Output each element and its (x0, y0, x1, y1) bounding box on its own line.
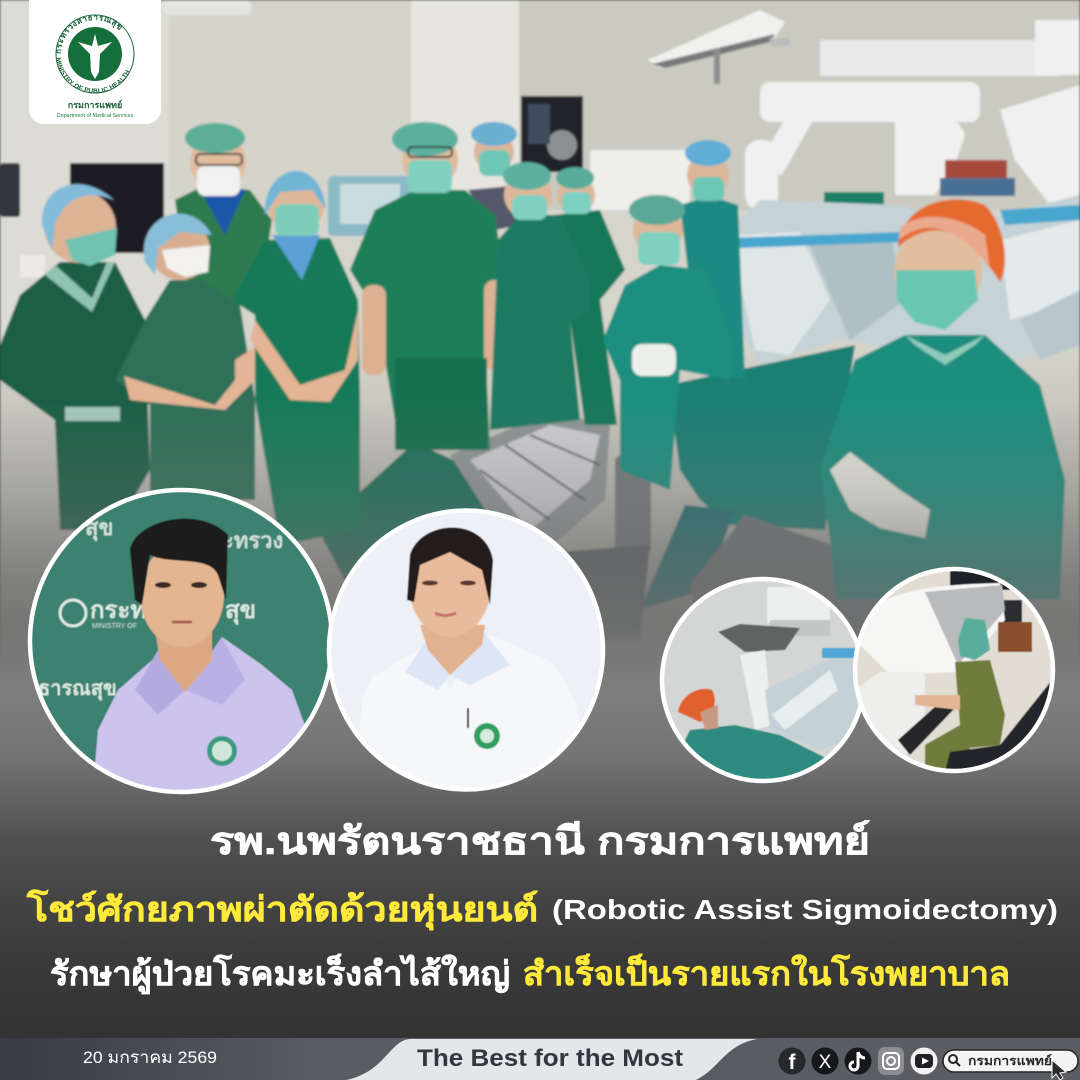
wall monitor (521, 96, 583, 172)
icon: facebook: f (788, 1051, 796, 1074)
icon: X: X (819, 1052, 832, 1073)
logo seal: กระทรวงสาธารณสุข (56, 16, 122, 54)
date: 20 มกราคม 2569 (83, 1048, 217, 1067)
logo caption English: Department of Medical Services (57, 113, 133, 119)
search pill (943, 1050, 1078, 1072)
person: woman dress gown (490, 162, 590, 430)
headline (26, 820, 1058, 995)
draped table and instruments (318, 345, 920, 640)
icon: instagram (878, 1047, 904, 1075)
icon: cursor (1052, 1060, 1066, 1080)
photo circle: robot arms in theatre (660, 575, 870, 790)
person: back teal gown (680, 140, 745, 380)
headline line 3 yellow: สำเร็จเป็นรายแรกในโรงพยาบาล (523, 953, 1010, 992)
headline line 2 english: (Robotic Assist Sigmoidectomy) (552, 894, 1058, 925)
logo seal (56, 14, 134, 94)
logo caption Thai: กรมการแพทย์ (68, 99, 122, 110)
person: woman teal gown (603, 195, 730, 490)
logo card: Department of Medical Services (29, 0, 161, 124)
robot arms (745, 20, 1080, 242)
headline line 2 yellow: โชว์ศักยภาพผ่าตัดด้วยหุ่นยนต์ (26, 889, 538, 931)
footer bar (0, 1038, 1080, 1080)
logo seal: MINISTRY OF PUBLIC HEALTH (56, 58, 130, 93)
portrait: director in lavender shirt: ธารณสุข (38, 678, 117, 701)
search pill: กรมการแพทย์ (968, 1054, 1052, 1068)
portrait: director in lavender shirt: กระทร (90, 597, 159, 624)
person: central surgeon (350, 122, 506, 450)
person: left nurse dark green (0, 184, 150, 530)
surgical light (648, 10, 790, 84)
equipment behind team (0, 150, 690, 277)
headline line 3 white: รักษาผู้ป่วยโรคมะเร็งลำไส้ใหญ่ (50, 953, 510, 995)
portrait: director in lavender shirt: สุข (225, 597, 256, 626)
portrait: director in lavender shirt (25, 485, 340, 800)
footer slogan ribbon (346, 1039, 757, 1080)
photo circle: surgeon at robot console (850, 565, 1060, 777)
icon: youtube (910, 1048, 938, 1074)
person: back row doctor (175, 123, 272, 300)
portrait: director in lavender shirt: ะทรวง (222, 528, 283, 553)
person: back blue cap (468, 122, 520, 230)
person: surgeon with orange cap (820, 199, 1065, 600)
person: woman white mask (115, 214, 260, 500)
portrait: director in lavender shirt: สุข (85, 515, 113, 542)
slogan: The Best for the Most (417, 1045, 683, 1072)
icon: facebook (778, 1048, 806, 1074)
icon: tiktok (844, 1048, 872, 1074)
person: far back scrub (555, 167, 625, 425)
person: woman blue collar (232, 171, 360, 545)
portrait: doctor in white shirt (325, 505, 610, 800)
plastic-draped robot arms (720, 195, 1080, 365)
headline line 1: รพ.นพรัตนราชธานี กรมการแพทย์ (210, 820, 870, 863)
icon: X (812, 1048, 838, 1074)
portrait: director in lavender shirt: MINISTRY OF (92, 623, 137, 630)
